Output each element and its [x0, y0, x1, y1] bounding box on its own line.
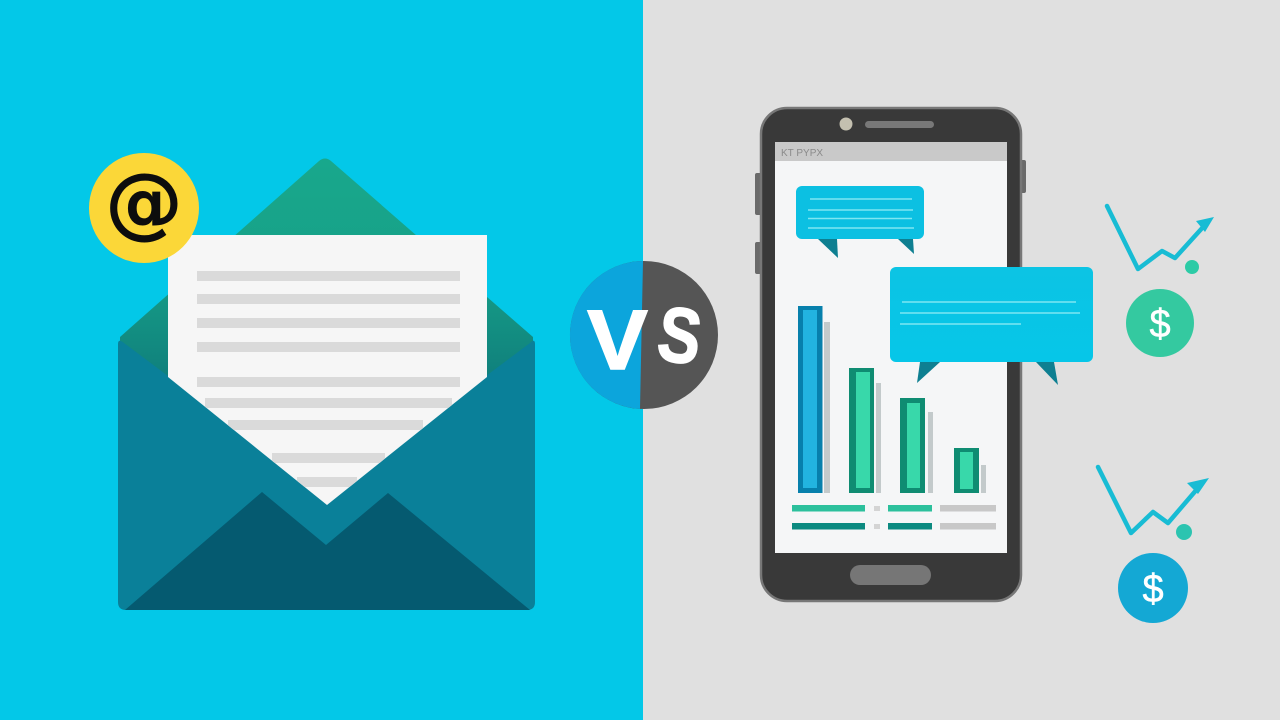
icon: green dollar coin: [1126, 289, 1194, 357]
panel: mobile background: [643, 0, 1280, 720]
bar shadows: [824, 322, 986, 493]
phone camera: [840, 118, 852, 130]
phone speaker: [865, 121, 934, 128]
icon: open envelope: [118, 158, 535, 610]
panel: email background: [0, 0, 643, 720]
icon: at sign badge: @: [105, 158, 183, 248]
VS badge: [570, 261, 718, 409]
icon: smartphone: [755, 108, 1026, 601]
envelope front pocket: [125, 492, 530, 610]
icon: at sign badge: [89, 153, 199, 263]
envelope body: [118, 341, 535, 610]
home button: [850, 565, 931, 585]
icon: trend arrow top: [1107, 206, 1214, 274]
bar 3: [900, 398, 925, 493]
VS badge: V: [587, 293, 648, 387]
icon: green dollar coin: $: [1149, 302, 1171, 346]
bar 4: [954, 448, 979, 493]
bar 2: [849, 368, 874, 493]
speech bubble: large: [890, 267, 1093, 385]
letter paper: [168, 235, 487, 505]
bar 1: [798, 306, 822, 493]
icon: blue dollar coin: [1118, 553, 1188, 623]
status bar: KT PYPX: [781, 148, 823, 159]
envelope flap: [120, 158, 533, 420]
icon: trend arrow bottom: [1098, 467, 1209, 540]
speech bubble: small: [796, 186, 924, 258]
chart legend rows: [792, 505, 996, 530]
VS badge: S: [652, 290, 707, 382]
phone screen: [775, 142, 1007, 553]
phone side buttons: [755, 160, 1026, 274]
phone body: [761, 108, 1021, 601]
bar chart: [792, 306, 996, 530]
icon: blue dollar coin: $: [1142, 567, 1164, 611]
status bar: [775, 142, 1007, 161]
